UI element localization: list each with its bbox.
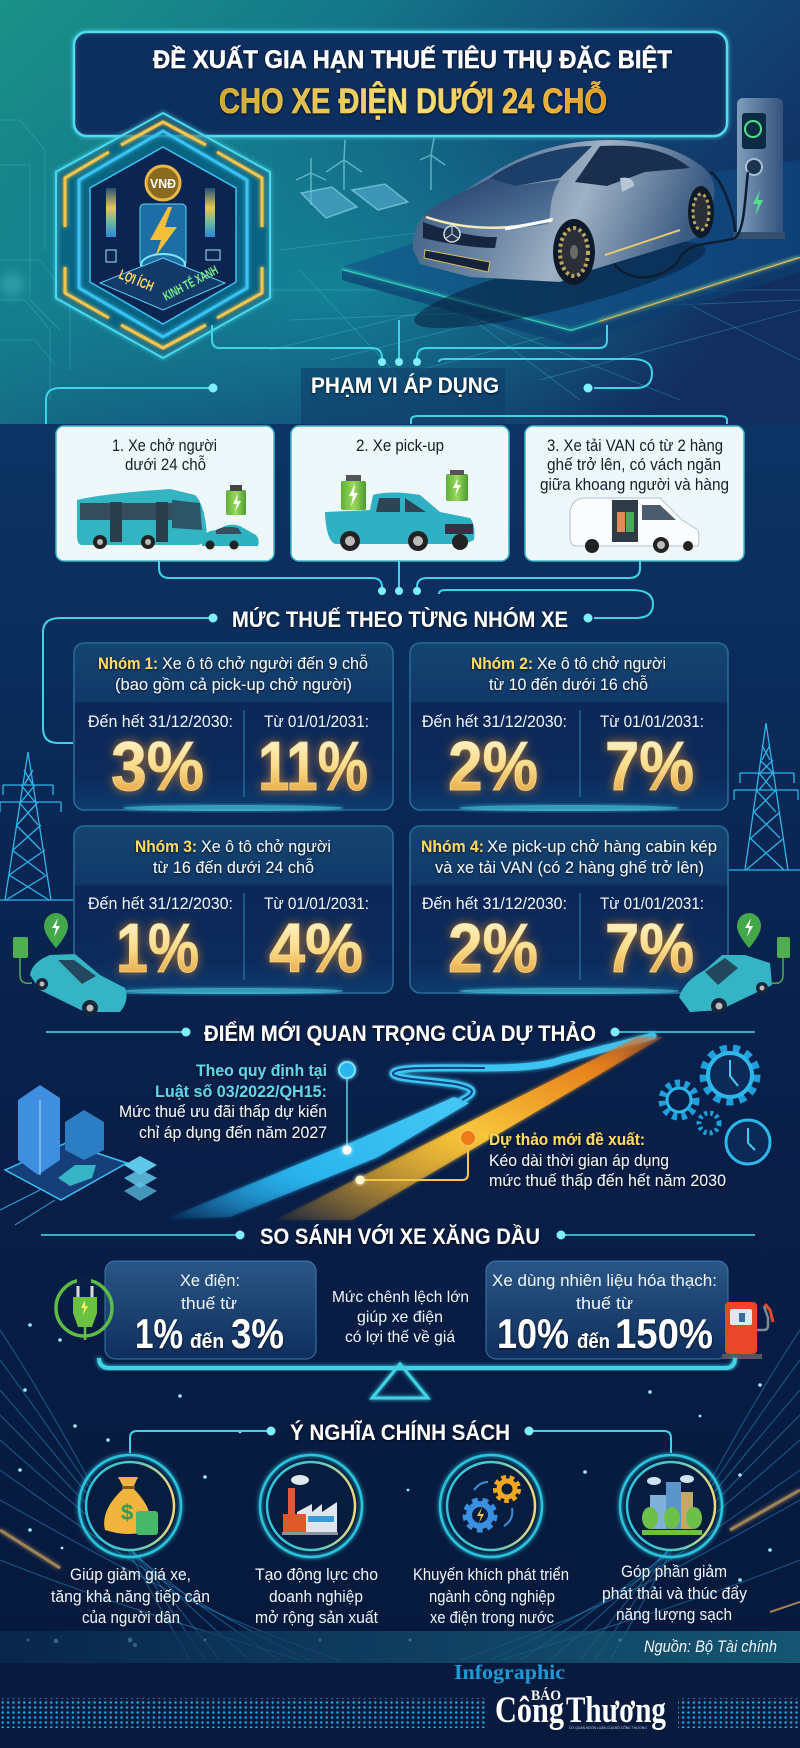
icon: fuel pump (722, 1302, 773, 1359)
group 4 rates: 7% (605, 909, 694, 987)
icon: factory (282, 1475, 338, 1535)
group 3 periods: Đến hết 31/12/2030: (88, 894, 233, 913)
group 1 rates (111, 727, 368, 805)
group 1 rates: 11% (258, 727, 368, 805)
group 4 rates: 2% (448, 909, 538, 987)
icon: money bag: $ (121, 1500, 133, 1525)
text: lower price: của người dân (82, 1608, 180, 1627)
group 2 heading (471, 654, 666, 694)
group 2 rates: 7% (605, 727, 694, 805)
marker: current law pin (339, 1062, 355, 1154)
group 1 heading: Xe ô tô chở người đến 9 chỗ (162, 654, 368, 673)
heading: policy meaning: Ý NGHĨA CHÍNH SÁCH (290, 1420, 510, 1445)
card 1 text: 1. Xe chở người (112, 436, 217, 455)
item: production (255, 1455, 378, 1627)
panel: group 1 (74, 643, 393, 811)
text: difference (332, 1289, 469, 1346)
panel: group 4 (410, 826, 728, 994)
group 2 rates: 2% (448, 727, 538, 805)
callout: current law: Mức thuế ưu đãi thấp dự kiến (119, 1102, 327, 1121)
group 2 periods: Đến hết 31/12/2030: (422, 712, 567, 731)
group 2 periods (422, 710, 704, 797)
background: hero (0, 0, 800, 425)
text: lower price (51, 1565, 210, 1627)
footer: logo (495, 1687, 666, 1731)
text: industry (413, 1565, 569, 1627)
heading: tax rates: MỨC THUẾ THEO TỪNG NHÓM XE (232, 607, 568, 632)
icon: charging station (600, 98, 785, 277)
text: difference: giúp xe điện (357, 1309, 443, 1326)
item: clean energy (602, 1455, 747, 1624)
group 4 rates (448, 909, 694, 987)
group 2 heading: từ 10 đến dưới 16 chỗ (489, 675, 648, 694)
text: clean energy: năng lượng sạch (616, 1605, 732, 1624)
text: difference: có lợi thế về giá (345, 1329, 455, 1346)
group 4 heading (421, 837, 717, 877)
heading: key change (46, 1021, 755, 1046)
electric tax label: Xe điện: (180, 1271, 240, 1290)
icon: glowing platform (342, 160, 800, 345)
group 1 heading (98, 654, 368, 694)
text: industry: Khuyến khích phát triển (413, 1565, 569, 1584)
callout: current law: Luật số 03/2022/QH15: (155, 1082, 327, 1101)
fossil tax value: 150% (615, 1310, 713, 1357)
electric tax value: 1% (135, 1310, 183, 1357)
card 3 text: giữa khoang người và hàng (540, 475, 729, 494)
text: industry: ngành công nghiệp (429, 1587, 555, 1606)
fossil tax value: đến (577, 1331, 610, 1353)
title line 2: CHO XE ĐIỆN DƯỚI 24 CHỖ (219, 81, 607, 121)
heading: scope: PHẠM VI ÁP DỤNG (311, 373, 499, 398)
group 1 heading: Nhóm 1: (98, 654, 158, 673)
icon: green plug (56, 1276, 112, 1340)
callout: current law (119, 1061, 327, 1142)
text: clean energy (602, 1562, 747, 1624)
text: difference: Mức chênh lệch lớn (332, 1289, 469, 1306)
panel: fossil car tax (486, 1261, 728, 1359)
source bar: Nguồn: Bộ Tài chính (644, 1637, 777, 1656)
icon: pick-up truck (325, 470, 474, 551)
fossil tax value (497, 1310, 713, 1357)
group 1 periods: Đến hết 31/12/2030: (88, 712, 233, 731)
footer: logo: BÁO (531, 1687, 561, 1704)
fossil tax label: Xe dùng nhiên liệu hóa thạch: (492, 1271, 717, 1290)
group 3 heading: Nhóm 3: (135, 837, 197, 856)
group 1 periods (88, 710, 369, 797)
group 3 rates (116, 909, 363, 987)
text: production: mở rộng sản xuất (255, 1608, 378, 1627)
icon: right electric pick-up (679, 913, 790, 1014)
callout: new proposal: Dự thảo mới đề xuất: (489, 1130, 645, 1149)
card 3 text (540, 436, 729, 494)
fossil tax label (492, 1271, 717, 1313)
callout: current law: chỉ áp dụng đến năm 2027 (139, 1123, 327, 1142)
panel: card 2 pick-up (291, 426, 509, 561)
panel: group 3 (74, 826, 393, 994)
icon: hexagon emblem (56, 113, 270, 358)
text: production (255, 1565, 378, 1627)
group 2 heading: Xe ô tô chở người (537, 654, 666, 673)
icon: money bag (104, 1477, 158, 1535)
heading: comparison: SO SÁNH VỚI XE XĂNG DẦU (260, 1224, 540, 1249)
group 4 periods: Đến hết 31/12/2030: (422, 894, 567, 913)
group 2 heading: Nhóm 2: (471, 654, 533, 673)
group 3 periods: Từ 01/01/2031: (264, 894, 369, 913)
group 4 heading: Nhóm 4: (421, 837, 484, 856)
title line 1: ĐỀ XUẤT GIA HẠN THUẾ TIÊU THỤ ĐẶC BIỆT (153, 44, 672, 74)
item: industry (413, 1455, 569, 1627)
icon: right transmission tower (728, 723, 800, 870)
group 3 rates: 1% (116, 909, 199, 987)
connector: scope to tax groups (43, 561, 653, 743)
footer dots (0, 1698, 800, 1728)
electric tax label: thuế từ (181, 1294, 237, 1313)
group 4 periods (422, 893, 704, 980)
icon: left transmission tower (0, 752, 74, 900)
icon: battery (226, 485, 246, 515)
icon: van (570, 498, 699, 553)
text: lower price: tăng khả năng tiếp cận (51, 1587, 210, 1606)
group 3 heading: Xe ô tô chở người (201, 837, 331, 856)
heading: comparison (41, 1224, 755, 1249)
group 3 heading (135, 837, 331, 877)
text: clean energy: Góp phần giảm (621, 1562, 727, 1581)
group 1 periods: Từ 01/01/2031: (264, 712, 369, 731)
card 1 text (112, 436, 217, 474)
icon: electric car (413, 140, 714, 285)
group 1 heading: (bao gồm cả pick-up chở người) (115, 675, 352, 694)
source bar (0, 1631, 800, 1663)
text: production: doanh nghiệp (269, 1587, 363, 1606)
card 2 text: 2. Xe pick-up (356, 436, 444, 455)
footer: logo: Công (495, 1690, 564, 1731)
group 3 rates: 4% (269, 909, 363, 987)
icon: green city (642, 1475, 702, 1535)
text: clean energy: phát thải và thúc đẩy (602, 1584, 747, 1603)
connector: hero to scope (46, 320, 727, 424)
icon: hexagon emblem: LỢI ÍCH (117, 266, 156, 294)
group 4 heading: và xe tải VAN (có 2 hàng ghế trở lên) (435, 858, 704, 877)
group 3 periods (88, 893, 369, 980)
panel: card 3 van (525, 426, 744, 561)
group 1 rates: 3% (111, 727, 204, 805)
card 1 text: dưới 24 chỗ (125, 455, 206, 474)
fossil tax value: 10% (497, 1310, 569, 1357)
electric tax value: đến (190, 1331, 224, 1353)
group 2 rates (448, 727, 694, 805)
group 3 heading: từ 16 đến dưới 24 chỗ (153, 858, 314, 877)
icon: wind turbines and solar panels (296, 138, 445, 218)
heading: policy meaning (130, 1420, 671, 1453)
callout: current law: Theo quy định tại (196, 1061, 327, 1080)
callout: new proposal: Kéo dài thời gian áp dụng (489, 1151, 669, 1170)
text: production: Tạo động lực cho (255, 1565, 378, 1584)
group 4 heading: Xe pick-up chở hàng cabin kép (487, 837, 717, 856)
icon: hexagon emblem: VNĐ (150, 176, 176, 191)
card 3 text: ghế trở lên, có vách ngăn (547, 455, 721, 474)
footer: logo: CƠ QUAN NGÔN LUẬN CỦA BỘ CÔNG THƯƠNG (569, 1725, 647, 1730)
panel: title (74, 32, 727, 136)
footer background (0, 1663, 800, 1748)
text: industry: xe điện trong nước (430, 1608, 554, 1627)
panel: card 1 bus (56, 426, 274, 561)
footer: logo: Thương (566, 1690, 666, 1731)
heading: key change: ĐIỂM MỚI QUAN TRỌNG CỦA DỰ THẢO (204, 1021, 596, 1046)
fossil tax label: thuế từ (576, 1294, 633, 1313)
icon: smart city (0, 1085, 157, 1225)
panel: electric car tax (105, 1261, 316, 1359)
icon: balance scale (99, 1358, 735, 1398)
card 3 text: 3. Xe tải VAN có từ 2 hàng (547, 436, 723, 455)
panel: group 2 (410, 643, 728, 811)
icon: gears (467, 1479, 517, 1528)
text: lower price: Giúp giảm giá xe, (70, 1565, 191, 1584)
icon: bus and car (77, 489, 259, 550)
callout: new proposal: mức thuế thấp đến hết năm 2030 (489, 1171, 726, 1190)
icon: glowing roads (163, 1036, 663, 1220)
marker: new proposal pin (356, 1130, 476, 1184)
icon: left electric car (13, 913, 127, 1016)
item: lower price (51, 1455, 210, 1627)
electric tax label (180, 1271, 240, 1313)
group 4 periods: Từ 01/01/2031: (600, 894, 704, 913)
background: lower section (0, 424, 800, 1663)
group 2 periods: Từ 01/01/2031: (600, 712, 704, 731)
callout: new proposal (489, 1130, 726, 1190)
footer: infographic label: Infographic (454, 1660, 565, 1684)
electric tax value: 3% (231, 1310, 284, 1357)
icon: hexagon emblem: KINH TẾ XANH (160, 262, 220, 304)
electric tax value (135, 1310, 284, 1357)
icon: gears and clocks (662, 1048, 770, 1164)
